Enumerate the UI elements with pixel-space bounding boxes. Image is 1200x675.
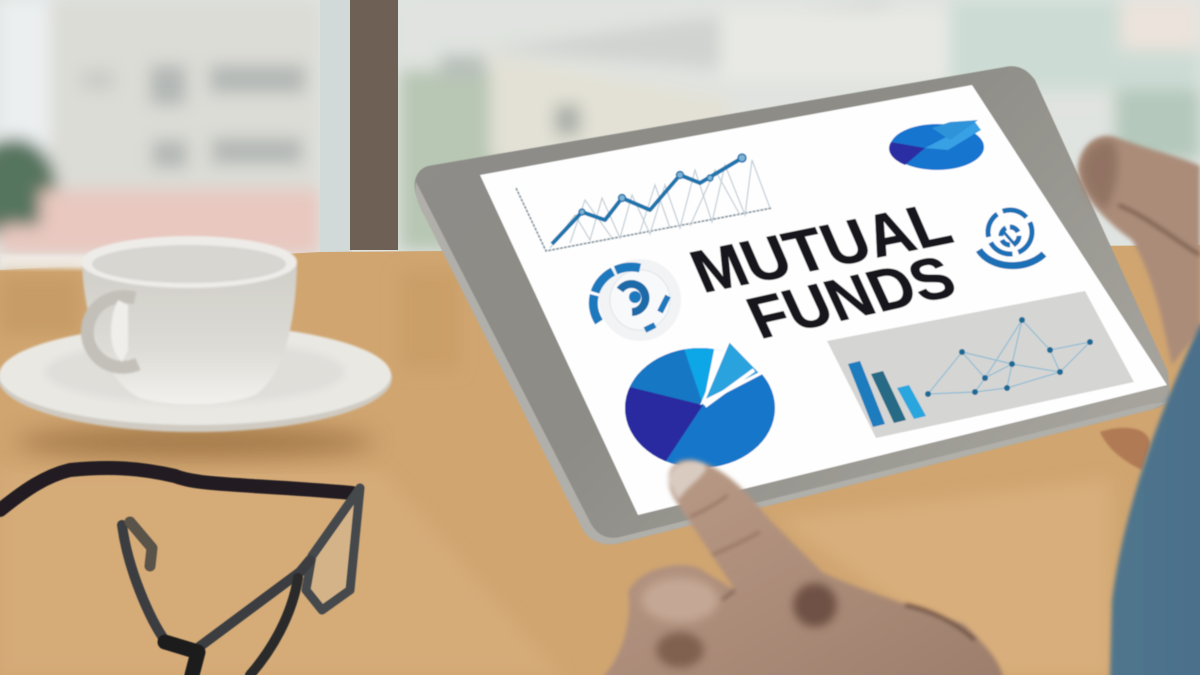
temple arm bbox=[0, 468, 352, 510]
shirt sleeve bbox=[1110, 320, 1200, 675]
blurred window background bbox=[0, 0, 1200, 270]
circular icon right bbox=[979, 210, 1044, 266]
right hand holding tablet bbox=[1078, 136, 1200, 365]
left lens bbox=[122, 525, 310, 650]
wooden table bbox=[0, 245, 1200, 675]
detached wedge bbox=[703, 340, 761, 402]
heading: mutual funds: FUNDS bbox=[737, 243, 965, 351]
heading: mutual funds: MUTUAL bbox=[681, 191, 961, 306]
right lens bbox=[306, 488, 360, 610]
grey panel with bars and network bbox=[827, 291, 1134, 438]
circular gauge icon left bbox=[593, 259, 681, 341]
window frame bbox=[320, 0, 352, 252]
bar chart bbox=[848, 361, 926, 427]
pointing hand bbox=[600, 459, 1004, 675]
tablet bbox=[415, 66, 1170, 544]
eyeglasses bbox=[0, 468, 360, 675]
folded arm stub bbox=[130, 522, 152, 566]
network graph bbox=[925, 317, 1093, 397]
back fingers under tablet bbox=[1100, 428, 1150, 470]
tablet screen bbox=[480, 85, 1167, 515]
line chart bbox=[516, 154, 772, 251]
large pie chart bbox=[624, 342, 776, 468]
coffee cup bbox=[81, 236, 297, 404]
cup handle bbox=[87, 297, 138, 367]
saucer bbox=[0, 324, 392, 432]
small pie chart icon bbox=[889, 120, 984, 170]
